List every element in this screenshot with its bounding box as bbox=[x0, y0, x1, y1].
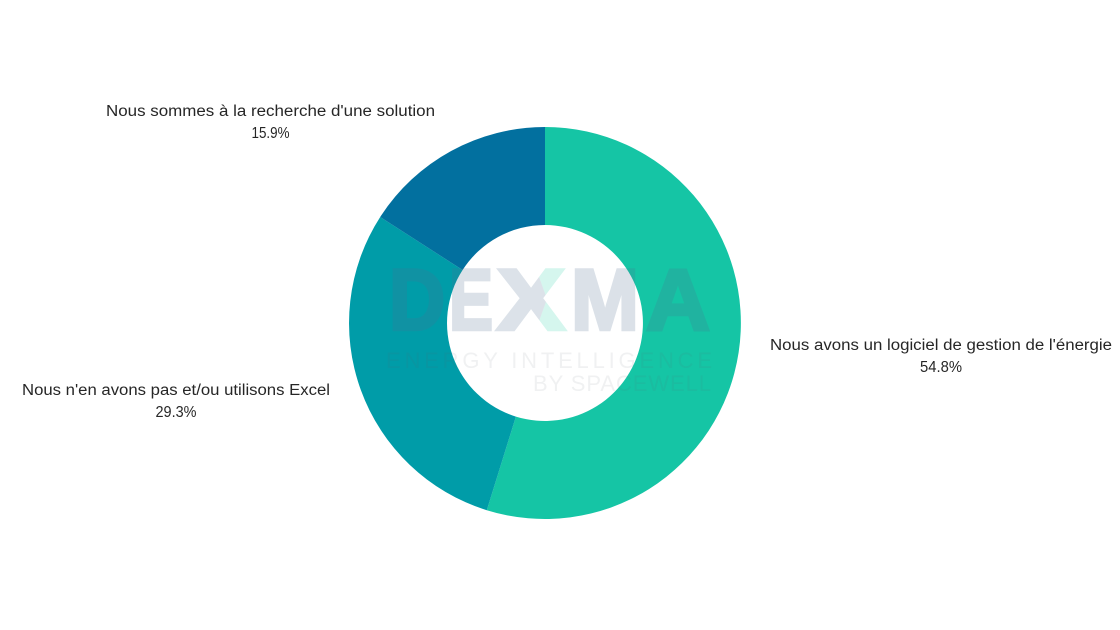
label: logiciel: 54.8% bbox=[920, 359, 962, 376]
watermark logo: A bbox=[646, 252, 710, 348]
watermark logo: X bbox=[497, 252, 565, 348]
watermark logo: BY SPACEWELL bbox=[533, 371, 711, 396]
watermark logo: D bbox=[389, 252, 445, 348]
watermark logo: ENERGY INTELLIGENCE bbox=[386, 348, 712, 373]
donut chart bbox=[349, 127, 741, 519]
segment: Excel 29.3% bbox=[349, 217, 516, 510]
watermark logo: X bbox=[497, 252, 565, 348]
segment: logiciel 54.8% bbox=[487, 127, 741, 519]
label: recherche: Nous sommes à la recherche d'une solution bbox=[106, 103, 435, 120]
label: logiciel bbox=[770, 337, 1112, 376]
label: recherche: 15.9% bbox=[252, 125, 290, 142]
watermark logo bbox=[392, 268, 711, 391]
label: Excel: Nous n'en avons pas et/ou utilisons Excel bbox=[22, 382, 330, 399]
segment: recherche 15.9% bbox=[380, 127, 545, 270]
label: Excel: 29.3% bbox=[156, 404, 197, 421]
label: Excel bbox=[22, 382, 330, 421]
watermark logo: M bbox=[571, 252, 639, 348]
label: recherche bbox=[106, 103, 435, 142]
label: logiciel: Nous avons un logiciel de gestion de l'énergie bbox=[770, 337, 1112, 354]
watermark logo: E bbox=[449, 252, 493, 348]
